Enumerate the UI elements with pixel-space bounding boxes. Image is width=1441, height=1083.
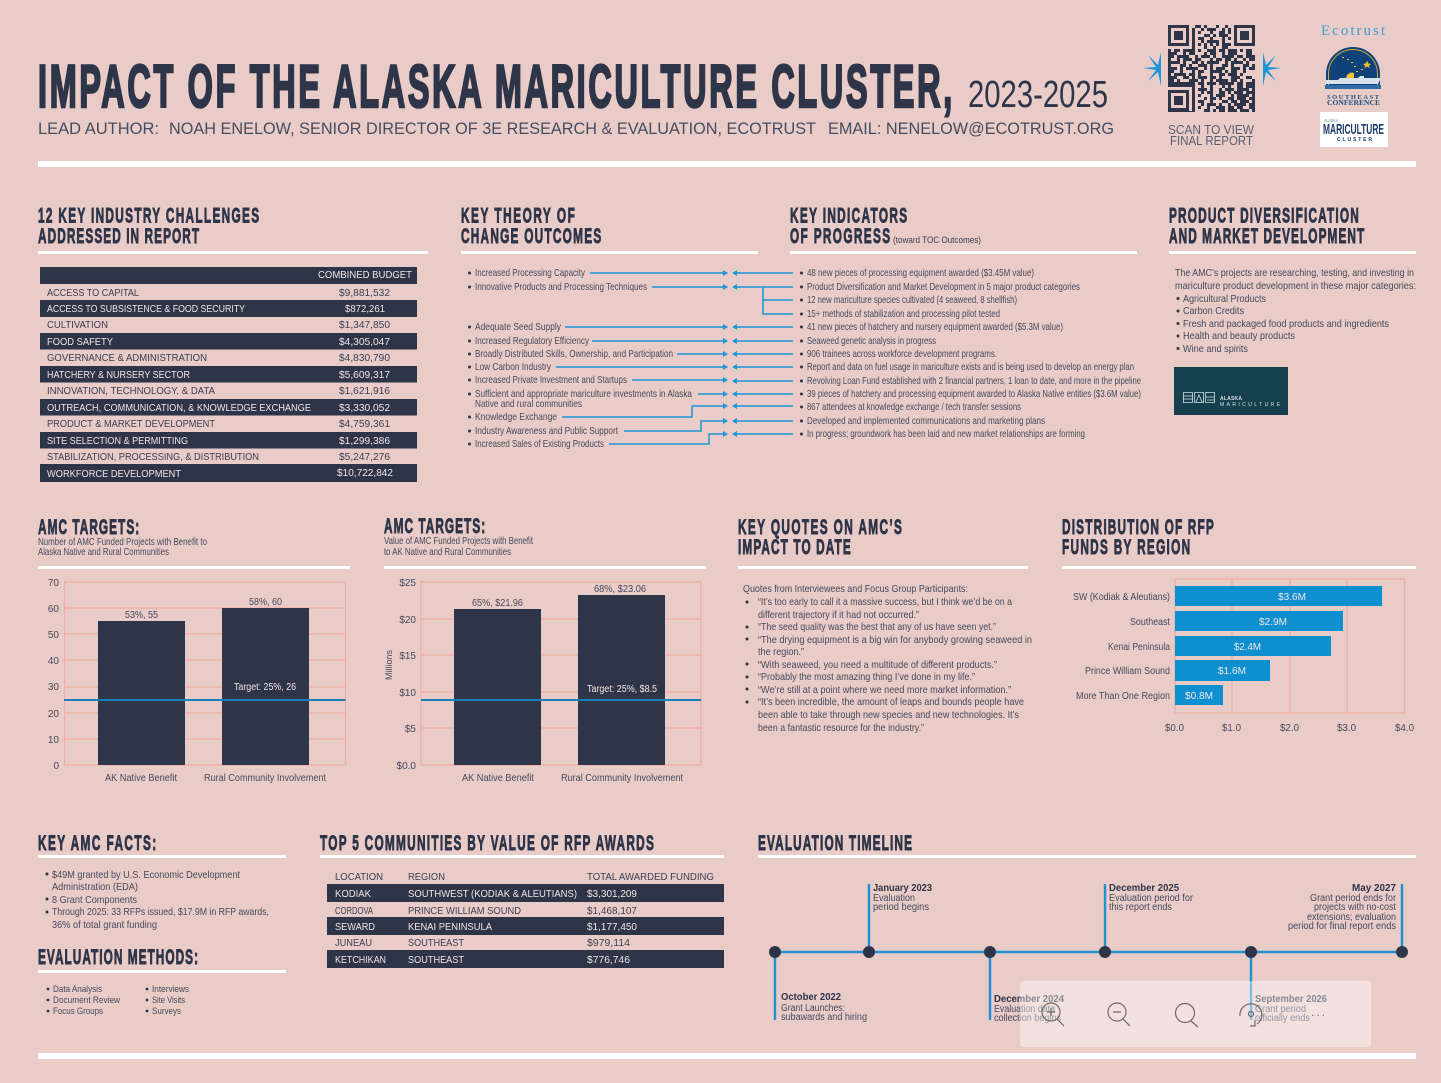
list: theory of change outcomes: Increased Regulatory Efficiency	[475, 335, 590, 347]
table: budget by challenge: COMBINED BUDGET	[318, 270, 412, 281]
text: product categories: Health and beauty products	[1183, 330, 1295, 342]
milestone: January 2023: January 2023	[873, 883, 932, 894]
list: theory of change outcomes: Innovative Products and Processing Techniques	[475, 281, 647, 293]
text: facts	[47, 869, 269, 931]
heading: indicators of progress: OF PROGRESS	[790, 223, 890, 248]
bar chart: funds by region: $4.0	[1395, 723, 1414, 734]
logo: Alaska Mariculture Cluster: CLUSTER	[1337, 137, 1372, 143]
panel: top 5 communities	[320, 830, 724, 968]
list: indicators of progress: 15+ methods of stabilization and processing pilot tested	[807, 308, 1000, 320]
list: theory of change outcomes: Increased Processing Capacity	[475, 267, 586, 279]
logo: Alaska Mariculture	[1174, 367, 1288, 415]
milestone: May 2027: extensions; evaluation	[1307, 912, 1396, 923]
arrows: outcomes to indicators	[556, 270, 793, 444]
heading: theory of change	[461, 203, 758, 254]
panel: AMC targets value	[384, 513, 706, 784]
QR caption	[1168, 122, 1255, 148]
bar chart: funds by region: $1.6M	[1218, 666, 1246, 677]
table: budget by challenge: INNOVATION, TECHNOLOGY, & DATA	[47, 386, 215, 397]
table: communities: TOTAL AWARDED FUNDING	[587, 872, 714, 883]
panel: key industry challenges	[38, 203, 428, 482]
bottom divider	[38, 1053, 1416, 1059]
list: indicators of progress: 48 new pieces of processing equipment awarded ($3.45M value)	[807, 267, 1034, 279]
bar chart: funds by region: Prince William Sound	[1085, 666, 1170, 677]
bar chart: value of projects: $15	[399, 651, 416, 662]
timeline axis	[769, 884, 1408, 1020]
bar chart: number of projects: 58%, 60	[249, 597, 282, 608]
list: indicators of progress: Developed and implemented communications and marketing plans	[807, 415, 1045, 427]
list: indicators of progress: 867 attendees at knowledge exchange / tech transfer sessions	[807, 401, 1021, 413]
bar chart: number of projects: 20	[48, 709, 59, 720]
viewer toolbar overlay	[1020, 981, 1371, 1047]
bar chart: value of projects	[384, 578, 701, 784]
heading: key AMC facts	[38, 830, 286, 858]
table: budget by challenge: CULTIVATION	[47, 320, 108, 331]
heading: challenges	[38, 203, 428, 254]
heading: indicators of progress: (toward TOC Outcomes)	[893, 235, 981, 245]
heading: evaluation timeline	[758, 830, 1416, 858]
table: communities: $1,468,107	[587, 906, 637, 917]
list: theory of change outcomes: Broadly Distributed Skills, Ownership, and Participation	[475, 348, 673, 360]
milestone: May 2027: projects with no-cost	[1314, 902, 1396, 913]
heading: evaluation timeline: EVALUATION TIMELINE	[758, 830, 912, 855]
heading: product diversification	[1169, 203, 1416, 254]
text: quotes: “Probably the most amazing thing I’ve done in my life.”	[758, 671, 975, 683]
bar chart: funds by region: SW (Kodiak & Aleutians)	[1073, 592, 1170, 603]
text: quotes: “With seaweed, you need a multitude of different products.”	[758, 659, 997, 671]
milestone: October 2022: October 2022	[781, 992, 841, 1003]
icon: starburst right	[1263, 52, 1281, 86]
heading: indicators of progress	[790, 203, 1137, 254]
heading: AMC targets number: AMC TARGETS:	[38, 514, 139, 539]
bar chart: funds by region: $0.0	[1165, 723, 1184, 734]
logo: Southeast Conference: SOUTHEAST	[1327, 94, 1380, 101]
panel: key AMC facts	[38, 830, 286, 931]
list: theory of change outcomes: Adequate Seed Supply	[475, 321, 562, 333]
table: communities	[327, 872, 724, 968]
list: methods: Focus Groups	[53, 1006, 103, 1017]
heading: AMC targets value	[384, 513, 706, 569]
heading: AMC targets number: Alaska Native and Rural Communities	[38, 546, 169, 558]
bar chart: value of projects: $10	[399, 688, 416, 699]
table: communities: CORDOVA	[335, 906, 373, 917]
table: budget by challenge: $4,305,047	[339, 337, 390, 348]
text: quotes: Quotes from Interviewees and Focus Group Participants:	[743, 583, 968, 595]
heading: AMC targets value: Value of AMC Funded Projects with Benefit	[384, 535, 533, 547]
bar chart: number of projects: 60	[48, 604, 59, 615]
table: budget by challenge: HATCHERY & NURSERY SECTOR	[47, 370, 190, 381]
heading: challenges: ADDRESSED IN REPORT	[38, 223, 199, 248]
list: methods: Surveys	[152, 1006, 181, 1017]
heading: key quotes: IMPACT TO DATE	[738, 534, 851, 559]
logo: Southeast Conference	[1325, 47, 1381, 107]
bar chart: funds by region: $2.9M	[1259, 617, 1287, 628]
text: quotes: been a fantastic resource for the industry.”	[758, 722, 924, 734]
bar chart: number of projects: 30	[48, 682, 59, 693]
top divider	[38, 161, 1416, 167]
milestone: May 2027	[1288, 883, 1397, 932]
bar chart: number of projects: Rural Community Involvement	[204, 773, 326, 784]
list: theory of change outcomes: Industry Awareness and Public Support	[475, 425, 618, 437]
bar chart: value of projects: $25	[399, 578, 416, 589]
milestone: October 2022: Grant Launches:	[781, 1003, 845, 1014]
milestone: October 2022	[781, 992, 867, 1023]
heading: theory of change: CHANGE OUTCOMES	[461, 223, 601, 248]
table: communities: $3,301,209	[587, 889, 637, 900]
icon: zoom in	[1042, 1003, 1064, 1026]
list: indicators of progress: Seaweed genetic analysis in progress	[807, 335, 936, 347]
table: communities: $979,114	[587, 938, 630, 949]
panel: product diversification	[1169, 203, 1416, 415]
text: facts: 36% of total grant funding	[52, 919, 157, 931]
panel: evaluation timeline	[758, 830, 1416, 1024]
bar chart: value of projects: Millions	[384, 650, 394, 680]
heading: challenges: 12 KEY INDUSTRY CHALLENGES	[38, 203, 259, 227]
text: product categories: Fresh and packaged food products and ingredients	[1183, 318, 1389, 330]
milestone: December 2024	[994, 994, 1064, 1024]
logo: Alaska Mariculture Cluster: MARICULTURE	[1323, 121, 1384, 138]
icon: rotate	[1240, 1004, 1262, 1026]
text: facts: 8 Grant Components	[52, 894, 137, 906]
milestone: January 2023: Evaluation	[873, 893, 915, 904]
text: product categories: Carbon Credits	[1183, 305, 1244, 317]
table: communities: $1,177,450	[587, 922, 637, 933]
text: quotes: “It’s been incredible, the amount of leaps and bounds people have	[758, 696, 1024, 708]
table: budget by challenge: FOOD SAFETY	[47, 337, 113, 348]
title: IMPACT OF THE ALASKA MARICULTURE CLUSTER,	[38, 53, 952, 121]
heading: theory of change: KEY THEORY OF	[461, 203, 575, 227]
heading: key AMC facts: KEY AMC FACTS:	[38, 830, 156, 855]
bar chart: number of projects: Target: 25%, 26	[234, 682, 296, 693]
table: budget by challenge: $3,330,052	[339, 403, 390, 414]
text: facts: $49M granted by U.S. Economic Development	[52, 869, 240, 881]
milestone: September 2026: Grant period	[1255, 1004, 1306, 1015]
heading: top 5 communities: TOP 5 COMMUNITIES BY VALUE OF RFP AWARDS	[320, 830, 654, 855]
heading: AMC targets value: to AK Native and Rural Communities	[384, 546, 511, 558]
QR caption: FINAL REPORT	[1170, 133, 1253, 148]
milestone: December 2024: December 2024	[994, 994, 1064, 1005]
milestone: December 2025: December 2025	[1109, 883, 1179, 894]
bar chart: funds by region: More Than One Region	[1076, 691, 1170, 702]
text: quotes: “The seed quality was the best that any of us have seen yet.”	[758, 621, 996, 633]
table: budget by challenge: $4,759,361	[339, 419, 390, 430]
table: communities: PRINCE WILLIAM SOUND	[408, 906, 521, 917]
bar chart: funds by region: $2.4M	[1234, 642, 1261, 653]
list: theory of change outcomes: Knowledge Exchange	[475, 411, 557, 423]
table: communities: SOUTHEAST	[408, 938, 464, 949]
QR code	[1168, 25, 1255, 111]
table: communities: KETCHIKAN	[335, 955, 386, 966]
heading: AMC targets number: Number of AMC Funded Projects with Benefit to	[38, 536, 207, 548]
table: budget by challenge: $9,881,532	[339, 288, 390, 299]
heading: key quotes	[738, 514, 1028, 569]
panel: key quotes	[738, 514, 1032, 734]
table: budget by challenge: $4,830,790	[339, 353, 390, 364]
panel: AMC targets number	[38, 514, 350, 784]
list: indicators of progress: 39 pieces of hatchery and processing equipment awarded to Alaska Native entities ($3.6M value)	[807, 388, 1141, 400]
text: quotes: “The drying equipment is a big win for anybody growing seaweed in	[758, 634, 1032, 646]
bar chart: funds by region	[1073, 579, 1414, 734]
heading: distribution	[1062, 514, 1416, 569]
icon: search	[1176, 1004, 1198, 1027]
table: budget by challenge	[40, 267, 417, 482]
table: communities: JUNEAU	[335, 938, 372, 949]
list: theory of change outcomes: Low Carbon Industry	[475, 361, 552, 373]
heading: product diversification: PRODUCT DIVERSIFICATION	[1169, 203, 1359, 227]
table: communities: KENAI PENINSULA	[408, 922, 492, 933]
author line: NOAH ENELOW, SENIOR DIRECTOR OF 3E RESEARCH & EVALUATION, ECOTRUST	[169, 119, 816, 138]
logo: Alaska Mariculture: ALASKA	[1220, 396, 1242, 402]
text: product categories: Agricultural Products	[1183, 293, 1266, 305]
table: communities: REGION	[408, 872, 445, 883]
milestone: September 2026: officially ends	[1255, 1013, 1310, 1024]
text: product categories	[1175, 267, 1416, 355]
bar chart: funds by region: $3.0	[1337, 723, 1356, 734]
list: indicators of progress	[802, 267, 1141, 440]
list: theory of change outcomes: Increased Private Investment and Startups	[475, 374, 627, 386]
heading: AMC targets value: AMC TARGETS:	[384, 513, 485, 538]
heading: key quotes: KEY QUOTES ON AMC’S	[738, 514, 902, 539]
table: budget by challenge: $5,609,317	[339, 370, 390, 381]
heading: distribution: FUNDS BY REGION	[1062, 534, 1190, 559]
milestone: December 2024: collection begins	[994, 1013, 1061, 1024]
table: communities: $776,746	[587, 955, 630, 966]
bar chart: funds by region: $3.6M	[1278, 592, 1306, 603]
table: budget by challenge: ACCESS TO SUBSISTENCE & FOOD SECURITY	[47, 304, 245, 315]
milestone: December 2025	[1109, 883, 1194, 913]
table: budget by challenge: GOVERNANCE & ADMINISTRATION	[47, 353, 207, 364]
milestone: January 2023: period begins	[873, 902, 929, 913]
list: methods: Interviews	[152, 984, 189, 995]
bar chart: funds by region: Southeast	[1130, 617, 1170, 628]
list: methods: Document Review	[53, 995, 120, 1006]
author line: LEAD AUTHOR:	[38, 119, 159, 138]
table: budget by challenge: $5,247,276	[339, 452, 390, 463]
logo: Alaska Mariculture Cluster: ALASKA	[1324, 118, 1338, 123]
bar chart: value of projects: $5	[405, 724, 416, 735]
table: budget by challenge: OUTREACH, COMMUNICATION, & KNOWLEDGE EXCHANGE	[47, 403, 311, 414]
table: budget by challenge: $1,347,850	[339, 320, 390, 331]
table: budget by challenge: $10,722,842	[337, 468, 393, 479]
author line	[38, 119, 1114, 138]
milestone: December 2025: this report ends	[1109, 902, 1172, 913]
table: budget by challenge: $1,621,916	[339, 386, 390, 397]
icon: starburst left	[1143, 52, 1161, 86]
bar chart: value of projects: Target: 25%, $8.5	[587, 684, 657, 695]
heading: product diversification: AND MARKET DEVELOPMENT	[1169, 223, 1365, 248]
heading: distribution: DISTRIBUTION OF RFP	[1062, 514, 1214, 539]
text: product categories: Wine and spirits	[1183, 343, 1248, 355]
icon: zoom out	[1108, 1003, 1130, 1026]
table: budget by challenge: $1,299,386	[339, 436, 390, 447]
text: quotes: been able to take through new species and new technologies. It’s	[758, 709, 1019, 721]
list: theory of change outcomes	[470, 267, 692, 450]
logo: Alaska Mariculture: MARICULTURE	[1220, 402, 1281, 408]
list: indicators of progress: 12 new mariculture species cultivated (4 seaweed, 8 shellfish)	[807, 294, 1017, 306]
bar chart: number of projects	[48, 578, 346, 784]
bar chart: funds by region: $1.0	[1222, 723, 1241, 734]
panel: evaluation methods	[38, 944, 286, 1017]
bar chart: value of projects: 65%, $21.96	[472, 598, 523, 609]
list: theory of change outcomes: Increased Sales of Existing Products	[475, 438, 604, 450]
author line: EMAIL: NENELOW@ECOTRUST.ORG	[828, 119, 1114, 138]
milestone: December 2024: Evaluation data	[994, 1004, 1055, 1015]
bar chart: value of projects: AK Native Benefit	[462, 773, 534, 784]
list: indicators of progress: 906 trainees across workforce development programs.	[807, 348, 997, 360]
icon: more: ...	[1311, 1005, 1325, 1019]
milestone: December 2025: Evaluation period for	[1109, 893, 1194, 904]
table: communities: SEWARD	[335, 922, 375, 933]
text: facts: Through 2025: 33 RFPs issued, $17.9M in RFP awards,	[52, 906, 269, 918]
table: communities: LOCATION	[335, 872, 383, 883]
list: methods: Data Analysis	[53, 984, 102, 995]
bar chart: value of projects: $0.0	[397, 761, 416, 772]
bar chart: number of projects: AK Native Benefit	[105, 773, 177, 784]
list: theory of change outcomes: Sufficient and appropriate mariculture investments in Alaska	[475, 388, 692, 400]
panel: distribution of RFP funds	[1062, 514, 1416, 734]
table: communities: KODIAK	[335, 889, 371, 900]
table: budget by challenge: $872,261	[345, 304, 385, 315]
heading: evaluation methods: EVALUATION METHODS:	[38, 944, 198, 969]
text: quotes: “It’s too early to call it a massive success, but I think we’d be on a	[758, 596, 1012, 608]
QR caption: SCAN TO VIEW	[1168, 122, 1255, 137]
bar chart: number of projects: 50	[48, 630, 59, 641]
bar chart: funds by region: $0.8M	[1185, 691, 1213, 702]
heading: AMC targets number	[38, 514, 350, 569]
list: theory of change outcomes: Native and rural communities	[475, 398, 582, 410]
bar chart: funds by region: $2.0	[1280, 723, 1299, 734]
text: quotes	[743, 583, 1032, 734]
list: methods	[48, 984, 189, 1017]
table: budget by challenge: ACCESS TO CAPITAL	[47, 288, 139, 299]
list: indicators of progress: Product Diversification and Market Development in 5 major product categories	[807, 281, 1080, 293]
list: indicators of progress: Revolving Loan Fund established with 2 financial partners, 1 loan to date, and more in the pipeline	[807, 375, 1141, 387]
text: quotes: “We’re still at a point where we need more market information.”	[758, 684, 1011, 696]
text: quotes: different trajectory if it had not occurred.”	[758, 609, 919, 621]
list: indicators of progress: Report and data on fuel usage in mariculture exists and is being used to develop an energy plan	[807, 361, 1134, 373]
heading: evaluation methods	[38, 944, 286, 973]
milestone: May 2027: Grant period ends for	[1310, 893, 1397, 904]
bar chart: number of projects: 10	[48, 735, 59, 746]
table: communities: SOUTHEAST	[408, 955, 464, 966]
milestone: May 2027: period for final report ends	[1288, 921, 1396, 932]
text: quotes: the region.”	[758, 646, 804, 658]
list: methods: Site Visits	[152, 995, 185, 1006]
bar chart: value of projects: $20	[399, 615, 416, 626]
table: budget by challenge: SITE SELECTION & PERMITTING	[47, 436, 188, 447]
list: indicators of progress: In progress; groundwork has been laid and new market relationships are forming	[807, 428, 1085, 440]
list: indicators of progress: 41 new pieces of hatchery and nursery equipment awarded ($5.3M value)	[807, 321, 1063, 333]
logo: Ecotrust: Ecotrust	[1321, 23, 1386, 39]
table: communities: SOUTHWEST (KODIAK & ALEUTIANS)	[408, 889, 577, 900]
table: budget by challenge: STABILIZATION, PROCESSING, & DISTRIBUTION	[47, 452, 259, 463]
bar chart: number of projects: 0	[53, 761, 59, 772]
logo: Alaska Mariculture Cluster	[1320, 112, 1388, 147]
heading: indicators of progress: KEY INDICATORS	[790, 203, 907, 227]
bar chart: number of projects: 40	[48, 656, 59, 667]
table: budget by challenge: WORKFORCE DEVELOPMENT	[47, 469, 181, 480]
bar chart: number of projects: 70	[48, 578, 59, 589]
bar chart: value of projects: Rural Community Involvement	[561, 773, 683, 784]
milestone: September 2026	[1255, 994, 1327, 1024]
milestone: September 2026: September 2026	[1255, 994, 1327, 1005]
table: budget by challenge: PRODUCT & MARKET DEVELOPMENT	[47, 419, 215, 430]
milestone: January 2023	[873, 883, 932, 913]
bar chart: number of projects: 53%, 55	[125, 610, 158, 621]
text: facts: Administration (EDA)	[52, 881, 138, 893]
milestone: October 2022: subawards and hiring	[781, 1012, 867, 1023]
title years: 2023-2025	[968, 74, 1108, 116]
bar chart: funds by region: Kenai Peninsula	[1108, 642, 1170, 653]
bar chart: value of projects: 68%, $23.06	[594, 584, 646, 595]
header	[38, 53, 1114, 138]
logo: Southeast Conference: CONFERENCE	[1327, 99, 1380, 107]
milestone: May 2027: May 2027	[1352, 883, 1396, 894]
